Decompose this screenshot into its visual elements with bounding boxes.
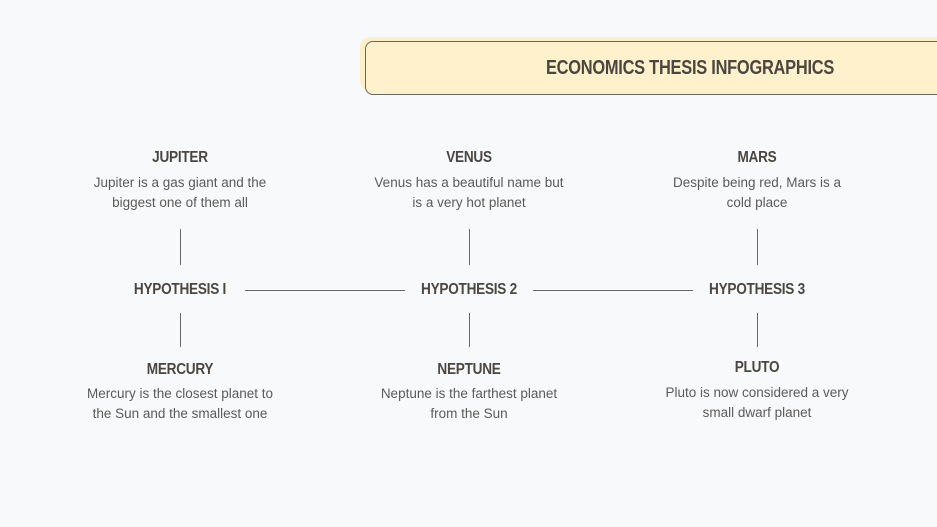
text: Mercury <box>87 386 273 421</box>
neptune: NEPTUNE <box>437 361 501 378</box>
hypothesis 1: HYPOTHESIS I <box>134 281 226 298</box>
text: Jupiter: Jupiter is a gas giant and the <box>94 175 266 190</box>
text: Mercury: Mercury is the closest planet to <box>87 386 273 401</box>
connector: bottom lines <box>180 313 758 347</box>
text: Pluto: small dwarf planet <box>703 405 811 420</box>
text: Venus: is a very hot planet <box>412 195 526 210</box>
text: Mars: cold place <box>727 195 787 210</box>
column 3: Mars: MARS <box>737 149 777 166</box>
column 1: Jupiter: JUPITER <box>152 149 208 166</box>
connector: top lines <box>180 229 758 265</box>
text: Venus <box>374 175 564 210</box>
hypothesis 2: HYPOTHESIS 2 <box>421 281 517 298</box>
column 2: Venus: VENUS <box>446 149 492 166</box>
text: Mars: Despite being red, Mars is a <box>673 175 841 190</box>
text: Jupiter <box>94 175 266 210</box>
connector: horizontal lines <box>245 290 693 291</box>
text: Venus: Venus has a beautiful name but <box>374 175 564 190</box>
title: ECONOMICS THESIS INFOGRAPHICS <box>546 57 834 79</box>
mercury: MERCURY <box>147 361 213 378</box>
text: Pluto <box>665 385 849 420</box>
title banner <box>360 37 937 95</box>
text: Neptune: Neptune is the farthest planet <box>381 386 557 401</box>
hypothesis 3: HYPOTHESIS 3 <box>709 281 805 298</box>
pluto: PLUTO <box>735 359 779 376</box>
text: Pluto: Pluto is now considered a very <box>665 385 849 400</box>
text: Jupiter: biggest one of them all <box>112 195 248 210</box>
text: Neptune: from the Sun <box>430 406 508 421</box>
text: Neptune <box>381 386 558 421</box>
text: Mercury: the Sun and the smallest one <box>93 406 267 421</box>
text: Mars <box>673 175 841 210</box>
